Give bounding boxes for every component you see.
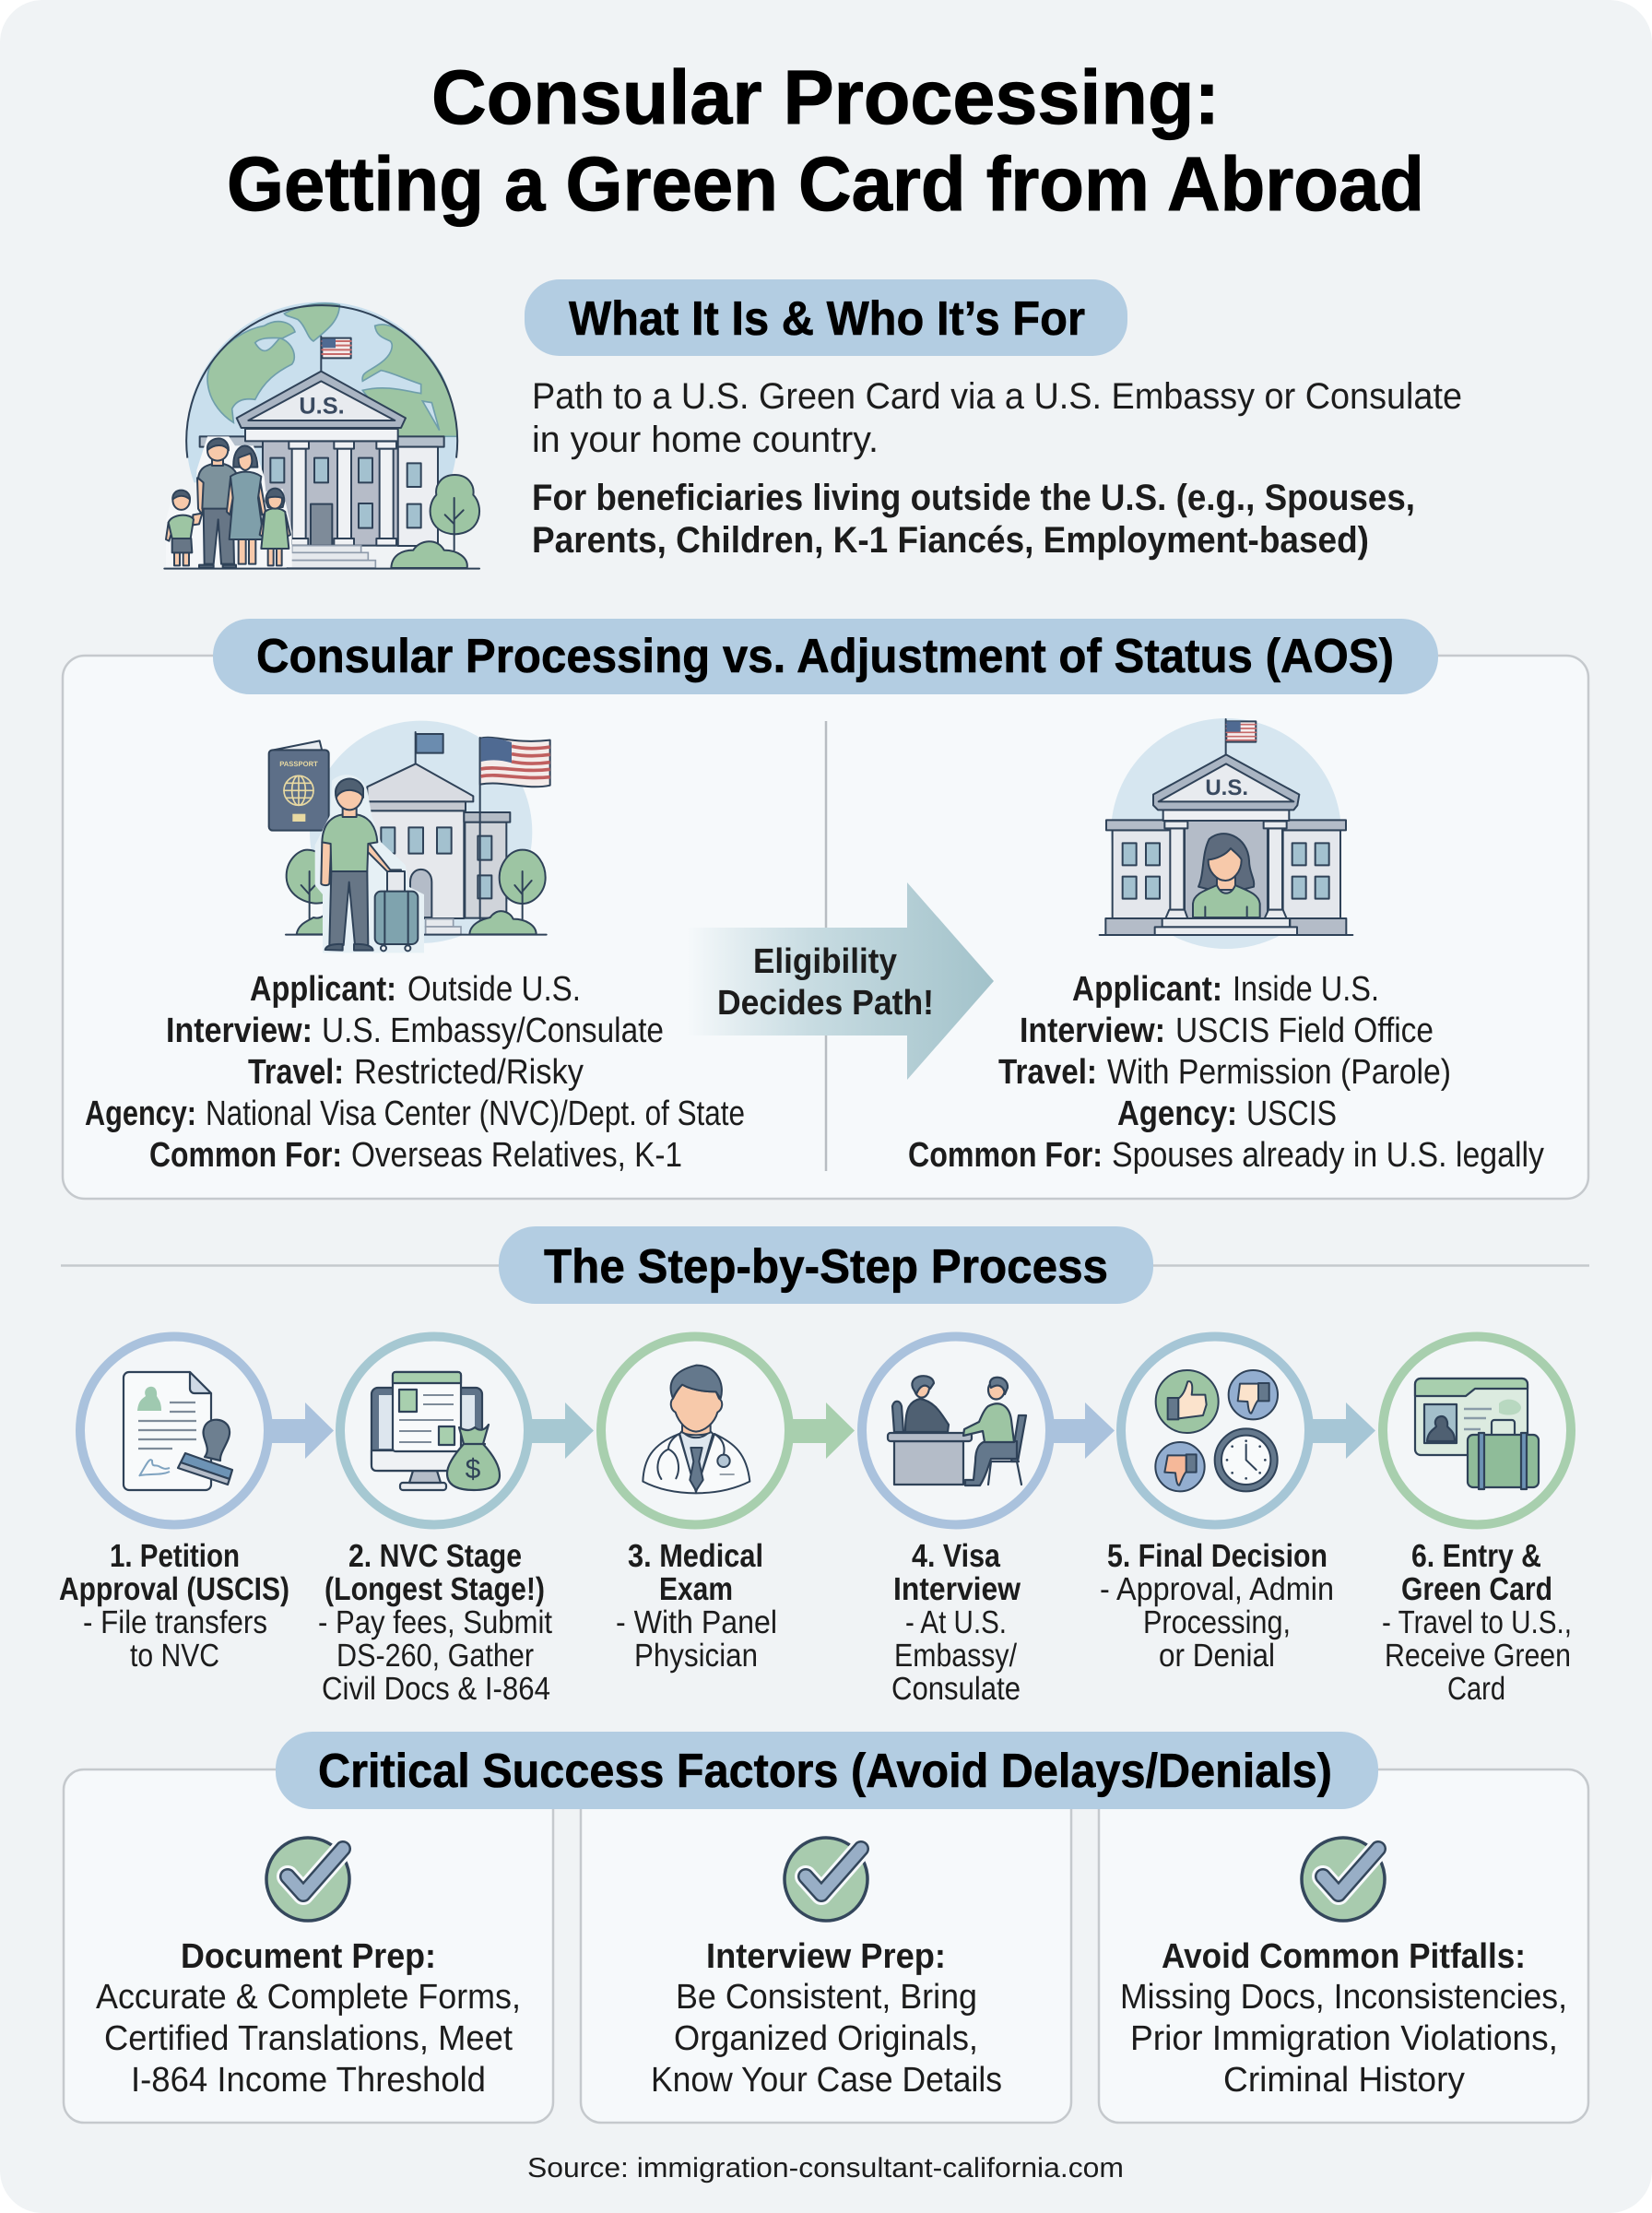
man xyxy=(197,439,238,568)
text block: consular processing facts: U.S. Embassy/Consulate xyxy=(322,1012,664,1050)
step ring 4 xyxy=(862,1337,1050,1525)
illustration: family, embassy and globe xyxy=(164,302,479,573)
text block: interview prep: Interview Prep: xyxy=(706,1937,946,1976)
girl xyxy=(260,489,290,565)
panel: interview prep xyxy=(581,1769,1071,2123)
step 2 text xyxy=(318,1538,552,1707)
text block: avoid common pitfalls: Criminal History xyxy=(1223,2061,1465,2100)
step 5 text: - Approval, Admin xyxy=(1100,1571,1334,1607)
step 5 text: 5. Final Decision xyxy=(1107,1538,1328,1574)
step ring 1 xyxy=(80,1337,268,1525)
text block: definition: Path to a U.S. Green Card via a U.S. Embassy or Consulate xyxy=(532,376,1462,417)
title xyxy=(227,54,1424,227)
step 6 text: Receive Green xyxy=(1385,1638,1571,1674)
step 2 text: Civil Docs & I-864 xyxy=(322,1671,550,1707)
icon: online portal and money bag: $ xyxy=(466,1454,481,1485)
text block: who it is for xyxy=(532,478,1415,561)
panel: document prep xyxy=(64,1769,553,2123)
illustration: applicant at USCIS office xyxy=(1100,718,1352,949)
section heading: step by step: The Step-by-Step Process xyxy=(544,1240,1108,1294)
icon: petition document and stamp xyxy=(124,1372,232,1490)
wing cornice xyxy=(200,436,444,447)
text block: adjustment of status facts: Travel: xyxy=(998,1053,1097,1092)
text block: consular processing facts: Interview: xyxy=(166,1012,313,1050)
step 4 text: 4. Visa xyxy=(912,1538,1000,1574)
text block: definition: in your home country. xyxy=(532,420,879,460)
panel: comparison xyxy=(63,656,1588,1199)
step 2 text: (Longest Stage!) xyxy=(324,1571,545,1607)
text block: document prep: Document Prep: xyxy=(181,1937,436,1976)
divider rule xyxy=(61,1264,1589,1267)
text block: interview prep: Know Your Case Details xyxy=(651,2061,1002,2100)
icon: check xyxy=(1302,1838,1385,1921)
icon: check xyxy=(266,1838,349,1921)
step 6 text: Card xyxy=(1447,1671,1505,1707)
step 4 text: Embassy/ xyxy=(894,1638,1017,1674)
text block: adjustment of status facts xyxy=(908,970,1544,1175)
step 6 text: - Travel to U.S., xyxy=(1382,1604,1572,1640)
illustration: applicant at USCIS office: U.S. xyxy=(1205,775,1248,799)
text block: adjustment of status facts: Inside U.S. xyxy=(1233,970,1379,1009)
icon: doctor xyxy=(643,1366,749,1493)
text block: adjustment of status facts: Interview: xyxy=(1020,1012,1165,1050)
text block: who it is for: For beneficiaries living outside the U.S. (e.g., Spouses, xyxy=(532,478,1415,518)
arrow: eligibility decides path: Decides Path! xyxy=(717,984,934,1023)
text block: consular processing facts: Common For: xyxy=(149,1136,342,1175)
family halo xyxy=(166,436,292,567)
step 1 text: - File transfers xyxy=(83,1604,267,1640)
text block: document prep: Accurate & Complete Forms, xyxy=(96,1978,521,2017)
text block: consular processing facts: Agency: xyxy=(85,1095,196,1133)
icon: online portal and money bag xyxy=(372,1372,500,1490)
trees xyxy=(287,850,325,904)
US flag xyxy=(478,738,483,919)
text block: avoid common pitfalls: Missing Docs, Inconsistencies, xyxy=(1120,1978,1567,2017)
icon: check xyxy=(785,1838,867,1921)
illustration: applicant abroad with passport and luggage xyxy=(269,721,550,953)
section heading: what it is: What It Is & Who It’s For xyxy=(569,292,1085,346)
title: Getting a Green Card from Abroad xyxy=(227,141,1424,227)
icon: visa interview xyxy=(888,1376,1026,1485)
text block: adjustment of status facts: With Permission (Parole) xyxy=(1107,1053,1451,1092)
icon: decision outcomes xyxy=(1155,1370,1278,1491)
text block: adjustment of status facts: Agency: xyxy=(1117,1095,1237,1133)
text block: adjustment of status facts: Common For: xyxy=(908,1136,1103,1175)
icon: green card and suitcase xyxy=(1415,1379,1539,1489)
text block: consular processing facts: Restricted/Risky xyxy=(354,1053,584,1092)
text block: adjustment of status facts: Spouses already in U.S. legally xyxy=(1112,1136,1544,1175)
illustration: family, embassy and globe: U.S. xyxy=(299,393,345,419)
section heading: success factors: Critical Success Factors (Avoid Delays/Denials) xyxy=(318,1745,1332,1798)
boy xyxy=(166,491,202,565)
text block: consular processing facts: Outside U.S. xyxy=(407,970,581,1009)
source line: Source: immigration-consultant-california.com xyxy=(527,2153,1124,2183)
text block: who it is for: Parents, Children, K-1 Fiancés, Employment-based) xyxy=(532,520,1369,561)
text block: adjustment of status facts: Applicant: xyxy=(1072,970,1222,1009)
step 2 text: 2. NVC Stage xyxy=(348,1538,522,1574)
text block: document prep: Certified Translations, Meet xyxy=(104,2019,513,2058)
step 5 text: Processing, xyxy=(1143,1604,1291,1640)
text block: interview prep xyxy=(651,1937,1002,2100)
text block: document prep xyxy=(96,1937,521,2100)
text block: document prep: I-864 Income Threshold xyxy=(131,2061,486,2100)
step ring 5 xyxy=(1121,1337,1309,1525)
section heading: comparison xyxy=(213,619,1438,694)
arrow: eligibility decides path: Eligibility xyxy=(753,942,897,981)
step 1 text: to NVC xyxy=(130,1638,219,1674)
step 1 text: Approval (USCIS) xyxy=(59,1571,289,1607)
text block: adjustment of status facts: USCIS xyxy=(1246,1095,1337,1133)
step 5 text xyxy=(1100,1538,1334,1674)
step 3 text: - With Panel xyxy=(616,1604,777,1640)
text block: avoid common pitfalls xyxy=(1120,1937,1567,2100)
step 4 text xyxy=(891,1538,1021,1707)
passport: PASSPORT xyxy=(279,760,318,768)
step 5 text: or Denial xyxy=(1159,1638,1275,1674)
woman xyxy=(227,446,266,564)
step 4 text: - At U.S. xyxy=(905,1604,1007,1640)
text block: consular processing facts: Applicant: xyxy=(250,970,396,1009)
step 3 text xyxy=(616,1538,777,1674)
text block: consular processing facts: National Visa Center (NVC)/Dept. of State xyxy=(206,1095,745,1133)
step 3 text: Physician xyxy=(634,1638,758,1674)
divider xyxy=(825,721,827,1171)
step ring 3 xyxy=(601,1337,789,1525)
arrow: eligibility decides path xyxy=(687,882,994,1080)
step 1 text xyxy=(59,1538,289,1674)
step 4 text: Interview xyxy=(893,1571,1021,1607)
traveler halo xyxy=(315,775,424,953)
step 2 text: DS-260, Gather xyxy=(336,1638,534,1674)
step 4 text: Consulate xyxy=(891,1671,1021,1707)
passport xyxy=(269,740,329,831)
step 6 text: 6. Entry & xyxy=(1411,1538,1541,1574)
section heading: success factors xyxy=(276,1732,1378,1809)
text block: interview prep: Organized Originals, xyxy=(674,2019,978,2058)
step arrows xyxy=(272,1402,1375,1459)
step 2 text: - Pay fees, Submit xyxy=(318,1604,552,1640)
section heading: comparison: Consular Processing vs. Adjustment of Status (AOS) xyxy=(256,630,1394,683)
text block: avoid common pitfalls: Prior Immigration Violations, xyxy=(1130,2019,1558,2058)
text block: definition xyxy=(532,376,1462,460)
text block: interview prep: Be Consistent, Bring xyxy=(676,1978,977,2017)
text block: consular processing facts: Travel: xyxy=(248,1053,344,1092)
step 6 text: Green Card xyxy=(1401,1571,1552,1607)
step ring 2 xyxy=(340,1337,528,1525)
step 6 text xyxy=(1382,1538,1572,1707)
text block: consular processing facts: Overseas Relatives, K-1 xyxy=(351,1136,682,1175)
step 3 text: Exam xyxy=(659,1571,733,1607)
tree xyxy=(431,475,479,534)
step ring 6 xyxy=(1383,1337,1571,1525)
text block: avoid common pitfalls: Avoid Common Pitfalls: xyxy=(1162,1937,1526,1976)
woman in doorway xyxy=(1193,834,1260,917)
panel: avoid common pitfalls xyxy=(1099,1769,1588,2123)
section heading: step by step xyxy=(499,1226,1153,1304)
text block: consular processing facts xyxy=(85,970,745,1175)
step 3 text: 3. Medical xyxy=(628,1538,763,1574)
step 1 text: 1. Petition xyxy=(110,1538,240,1574)
text block: adjustment of status facts: USCIS Field Office xyxy=(1175,1012,1434,1050)
section heading: what it is xyxy=(525,279,1127,356)
title: Consular Processing: xyxy=(431,54,1220,140)
